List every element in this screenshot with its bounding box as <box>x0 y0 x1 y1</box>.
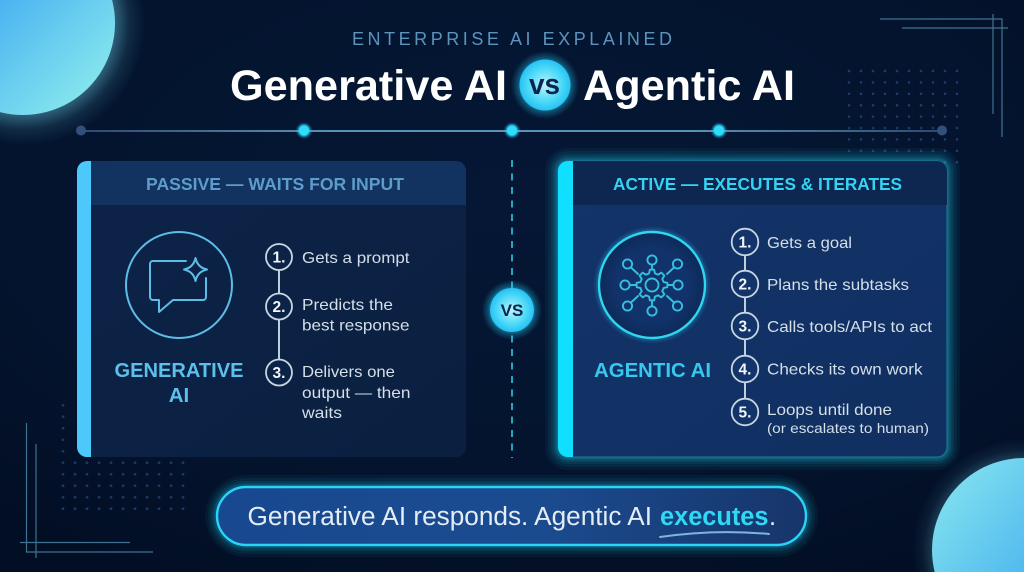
panel label: agentic ai: AGENTIC AI <box>594 359 711 382</box>
callout: key takeaway <box>217 487 806 545</box>
step 1: 1. <box>739 234 751 252</box>
panel label: generative ai <box>114 359 244 407</box>
underline accent <box>660 532 769 537</box>
icon: gear network <box>599 232 705 338</box>
panel header band <box>573 161 947 205</box>
step 3: 3. <box>739 318 751 336</box>
title: agentic ai: Agentic AI <box>583 62 795 110</box>
step 5: 5. <box>739 404 751 422</box>
steps list: agentic ai <box>732 229 933 436</box>
step 2: 2. <box>273 299 285 316</box>
panel: agentic ai <box>558 161 947 457</box>
decoration: top right dot grid <box>843 65 963 167</box>
step 5: (or escalates to human) <box>767 420 929 436</box>
step 3: 3. <box>273 365 285 382</box>
step 2: Predicts the <box>302 297 393 314</box>
step 3: Calls tools/APIs to act <box>767 319 933 336</box>
step 4: 4. <box>739 362 751 378</box>
timeline rule with nodes <box>76 122 947 139</box>
title: vs badge <box>511 51 579 119</box>
decorative circle: top left <box>0 0 146 146</box>
title: vs badge: vs <box>529 69 560 101</box>
decoration: top right corner lines <box>880 14 1008 137</box>
step 5: Loops until done <box>767 402 892 419</box>
step 1 <box>266 244 410 270</box>
step 1: Gets a prompt <box>302 250 410 267</box>
center divider with vs badge: VS <box>501 301 523 320</box>
step 3 <box>732 313 933 339</box>
callout: key takeaway: executes <box>660 503 768 531</box>
decoration: bottom left corner lines <box>20 423 153 558</box>
decoration: bottom left dot grid <box>57 399 189 514</box>
step 3: waits <box>301 405 342 422</box>
panel label: generative ai: GENERATIVE <box>114 359 244 382</box>
steps list: generative ai <box>266 244 410 422</box>
title <box>230 51 795 119</box>
step 3: Delivers one <box>302 364 395 381</box>
step 1 <box>732 229 852 255</box>
step 1: 1. <box>273 250 285 266</box>
panel header text: PASSIVE — WAITS FOR INPUT <box>146 174 404 194</box>
panel accent strip <box>77 161 91 457</box>
step 2 <box>732 271 909 297</box>
step 4: Checks its own work <box>767 362 924 378</box>
center divider with vs badge <box>482 160 542 458</box>
step 2: best response <box>302 318 410 334</box>
decorative circle: bottom right <box>912 438 1024 572</box>
step 1: Gets a goal <box>767 235 852 252</box>
step 2: Plans the subtasks <box>767 277 909 294</box>
icon: chat bubble with sparkle <box>126 232 232 338</box>
callout: key takeaway: Generative AI responds. Agentic AI <box>248 503 652 531</box>
panel header band <box>91 161 466 205</box>
step 4 <box>732 356 924 382</box>
panel label: generative ai: AI <box>169 384 189 407</box>
step 5 <box>732 399 929 436</box>
callout: key takeaway: . <box>769 503 776 531</box>
panel header text: ACTIVE — EXECUTES & ITERATES <box>613 174 902 194</box>
title: generative ai: Generative AI <box>230 62 507 110</box>
step 3: output — then <box>302 385 410 402</box>
panel accent strip <box>558 161 573 457</box>
step 2: 2. <box>739 276 751 294</box>
step 2 <box>266 294 410 334</box>
step 3 <box>266 360 410 422</box>
eyebrow heading: ENTERPRISE AI EXPLAINED <box>352 29 672 49</box>
panel: generative ai <box>77 161 466 457</box>
